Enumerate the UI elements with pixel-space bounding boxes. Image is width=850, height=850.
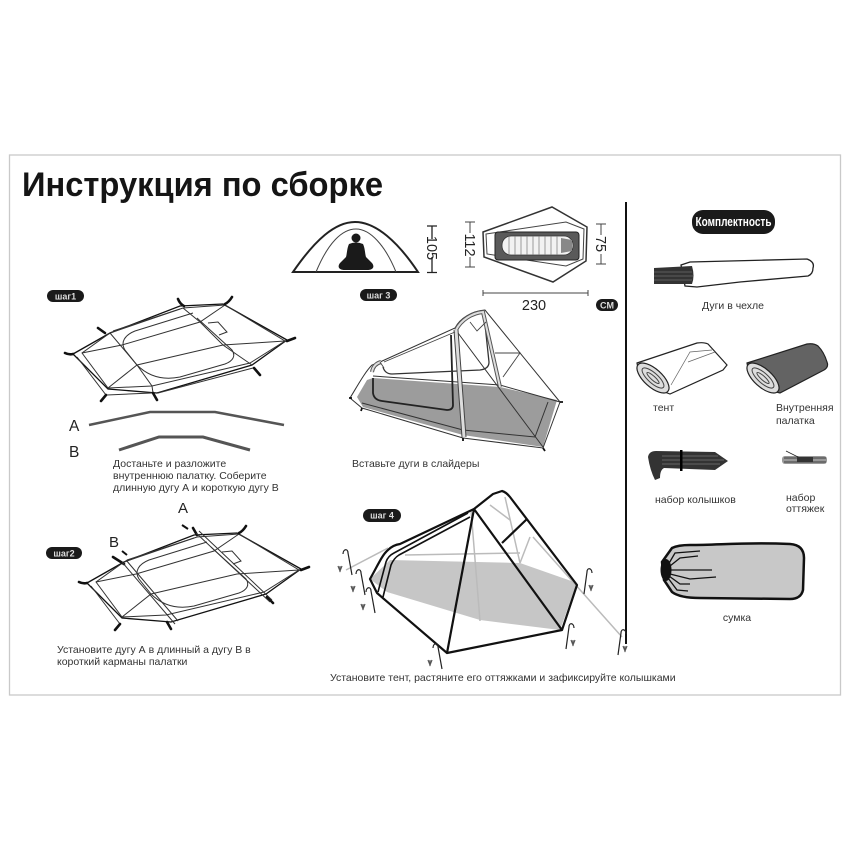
icon: peg set (648, 450, 728, 480)
heading: kit contents (692, 210, 775, 234)
diagram: poles A and B: B (69, 444, 79, 461)
diagram: tent height side view (293, 222, 439, 272)
text: step 1 instruction: внутреннюю палатку. Соберите (113, 470, 267, 482)
diagram: tent footprint top view: 75 (592, 236, 608, 252)
label: poles in bag: Дуги в чехле (702, 300, 764, 312)
icon: guy lines (782, 451, 827, 464)
label: guy lines: набор (786, 492, 815, 504)
diagram: tent footprint top view: 230 (522, 298, 546, 314)
diagram: step 1 inner tent laid out (65, 297, 295, 401)
diagram: step 4 tent with fly and guy lines (338, 491, 627, 669)
badge: step 4: шаг 4 (370, 510, 394, 520)
badge: step 2 (46, 547, 82, 559)
diagram: step 3 tent with poles (349, 310, 563, 451)
diagram: tent footprint top view: 112 (461, 233, 477, 257)
label: peg set: набор колышков (655, 494, 736, 506)
label: inner tent: Внутренняя (776, 402, 834, 414)
icon: poles in bag (654, 259, 813, 287)
text: step 1 instruction: Достаньте и разложите (113, 458, 226, 470)
icon: rolled fly (632, 343, 727, 398)
diagram: tent footprint top view (461, 207, 608, 314)
badge: step 1 (47, 290, 84, 302)
unit badge: cm (596, 299, 618, 311)
diagram: step 2 poles inserted (79, 500, 309, 630)
badge: step 3: шаг 3 (367, 290, 390, 300)
badge: step 2: шаг2 (53, 548, 75, 558)
text: step 2 instruction: короткий карманы палатки (57, 656, 188, 668)
label: carry bag: сумка (723, 612, 751, 624)
text: step 2 instruction: Установите дугу А в длинный а дугу В в (57, 644, 251, 656)
text: step 3 instruction: Вставьте дуги в слайдеры (352, 458, 479, 470)
icon: carry bag (660, 543, 804, 599)
unit badge: cm: CM (600, 300, 614, 310)
badge: step 3 (360, 289, 397, 301)
label: inner tent: палатка (776, 415, 815, 427)
diagram: poles A and B: A (69, 418, 80, 435)
icon: rolled inner tent (742, 344, 828, 398)
diagram: tent height side view: 105 (423, 236, 439, 260)
heading: kit contents: Комплектность (696, 214, 772, 229)
text: step 1 instruction: длинную дугу А и короткую дугу В (113, 482, 279, 494)
icon: meditating person (339, 234, 373, 270)
badge: step 1: шаг1 (55, 292, 76, 302)
diagram: step 2 poles inserted: A (178, 500, 188, 517)
label: fly: тент (653, 402, 674, 414)
frame (10, 155, 840, 695)
text: step 4 instruction: Установите тент, растяните его оттяжками и зафиксируйте колышками (330, 672, 676, 684)
vertical divider (625, 202, 627, 644)
label: guy lines: оттяжек (786, 503, 825, 515)
diagram: poles A and B (69, 412, 284, 461)
title: Инструкция по сборке (22, 166, 383, 204)
badge: step 4 (363, 509, 401, 522)
diagram: step 2 poles inserted: B (109, 534, 119, 551)
